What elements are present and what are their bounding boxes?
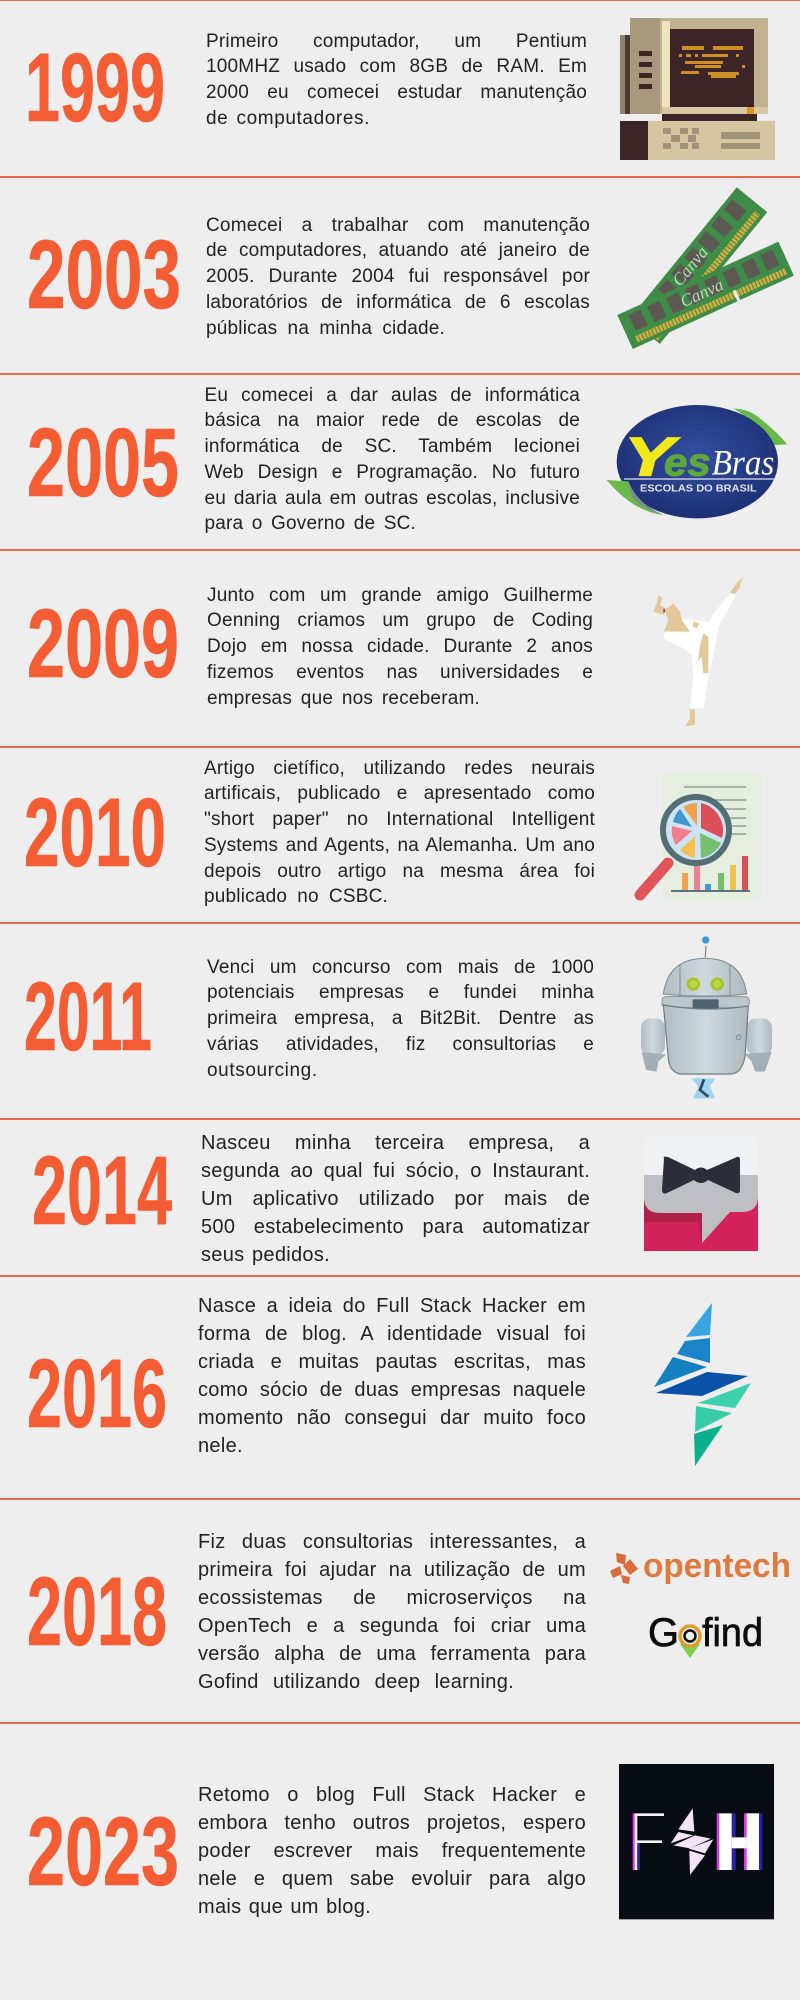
text: 2014 — [201, 1132, 590, 1266]
text: 2014: Um aplicativo utilizado por mais de — [201, 1188, 590, 1210]
text: 2023: embora tenho outros projetos, espero — [198, 1812, 586, 1834]
text: 1999: Primeiro computador, um Pentium — [206, 30, 587, 52]
text: 2016: como sócio de duas empresas naquele — [198, 1379, 586, 1401]
text: 2014: segunda ao qual fui sócio, o Instaurant. — [201, 1160, 590, 1182]
text: 2005: Eu comecei a dar aulas de informática — [204, 384, 580, 406]
text: 2018: Gofind utilizando deep learning. — [198, 1671, 514, 1693]
text: 2016 — [198, 1295, 586, 1457]
upper stick — [629, 187, 767, 344]
text: 2003: públicas na minha cidade. — [206, 318, 445, 339]
icon: Full Stack Hacker lightning bolt — [654, 1303, 751, 1466]
text: 2003: laboratórios de informática de 6 escolas — [206, 292, 590, 313]
panel: 2010 — [0, 747, 800, 923]
text: 2005: Web Design e Programação. No futuro — [204, 462, 580, 483]
text: 2010: "short paper" no International Intelligent — [204, 809, 595, 830]
text: 2005: informática de SC. Também lecionei — [204, 436, 580, 457]
text: 2016: momento não consegui dar muito foco — [198, 1407, 586, 1429]
text: 2011: outsourcing. — [207, 1060, 318, 1081]
text: 2018: Fiz duas consultorias interessantes, a — [198, 1531, 586, 1553]
icon: Yes Bras logo: Y — [624, 425, 680, 487]
text: 2016: forma de blog. A identidade visual foi — [198, 1323, 586, 1345]
text: 2003: 2005. Durante 2004 fui responsável por — [206, 266, 590, 287]
icon: magnifier over report chart — [634, 773, 761, 900]
text: 2003: de computadores, atuando até janeiro de — [206, 240, 590, 261]
text: 2009: Oenning criamos um grupo de Coding — [207, 610, 593, 631]
text: 2011: primeira empresa, a Bit2Bit. Dentre as — [207, 1008, 594, 1029]
text: 2009: fizemos eventos nas universidades e — [207, 662, 593, 683]
text: 2023: poder escrever mais frequentemente — [198, 1840, 586, 1862]
text: 2014: seus pedidos. — [201, 1244, 330, 1266]
text: 2016: Nasce a ideia do Full Stack Hacker em — [198, 1295, 586, 1317]
lower stick — [617, 242, 794, 349]
text: 2003 — [206, 214, 590, 339]
text: 2010: Systems and Agents, na Alemanha. Um ano — [204, 835, 595, 856]
icon: robot — [641, 936, 772, 1098]
text: 2009: Junto com um grande amigo Guilherme — [207, 584, 593, 606]
text: 2023: Retomo o blog Full Stack Hacker e — [198, 1784, 586, 1806]
icon: Instaurant app logo — [644, 1156, 758, 1251]
text: 2010: Artigo cietífico, utilizando redes neurais — [204, 758, 595, 778]
icon: Yes Bras logo: ESCOLAS DO BRASIL — [640, 483, 757, 494]
text: 2005: para o Governo de SC. — [204, 513, 416, 534]
text: 2003: Comecei a trabalhar com manutenção — [206, 214, 590, 236]
text: 2005 — [204, 384, 580, 534]
text: 2018: ecossistemas de microserviços na — [198, 1587, 586, 1609]
text: 1999: de computadores. — [206, 108, 370, 129]
text: 2014: 500 estabelecimento para automatizar — [201, 1216, 590, 1238]
text: 2010: artificais, publicado e apresentado como — [204, 783, 595, 804]
text: 1999 — [206, 30, 587, 129]
text: 1999: 100MHZ usado com 8GB de RAM. Em — [206, 56, 587, 77]
text: 2010: depois outro artigo na mesma área foi — [204, 861, 595, 882]
panel: 2014 — [0, 1119, 800, 1276]
panel: 2005 — [0, 374, 800, 550]
icon: Yes Bras logo — [606, 405, 788, 518]
text: 2011: Venci um concurso com mais de 1000 — [207, 956, 594, 978]
upper stick: Canva — [669, 243, 712, 290]
lower stick: Canva — [677, 275, 727, 311]
text: 2009: Dojo em nossa cidade. Durante 2 anos — [207, 636, 593, 657]
panel: 2011 — [0, 923, 800, 1119]
panel: 2023 — [0, 1723, 800, 2000]
logo: Gofind — [648, 1615, 763, 1658]
panel: 2018 — [0, 1499, 800, 1723]
text: 2023: mais que um blog. — [198, 1896, 371, 1918]
panel: 2003 — [0, 177, 800, 374]
icon: Yes Bras logo: es — [664, 440, 711, 484]
text: 2005: eu daria aula em outras escolas, inclusive — [204, 488, 580, 509]
text: 2009: empresas que nos receberam. — [207, 688, 480, 709]
text: 1999: 2000 eu comecei estudar manutenção — [206, 82, 587, 103]
text: 2023: nele e quem sabe evoluir para algo — [198, 1868, 586, 1890]
text: 2023 — [198, 1784, 586, 1918]
panel: 1999 — [0, 0, 800, 176]
icon: RAM memory sticks — [617, 187, 794, 349]
text: 2018 — [198, 1531, 586, 1693]
icon: FSH logo square — [619, 1764, 774, 1920]
text: 2018: versão alpha de uma ferramenta para — [198, 1643, 586, 1665]
text: 2016: criada e muitas pautas escritas, mas — [198, 1351, 586, 1373]
text: 2018: primeira foi ajudar na utilização de um — [198, 1559, 586, 1581]
panel: 2009 — [0, 550, 800, 747]
text: 2011: várias atividades, fiz consultorias e — [207, 1034, 594, 1055]
icon: karate kick figure — [654, 578, 743, 727]
text: 2016: nele. — [198, 1435, 243, 1457]
panel: 2016 — [0, 1276, 800, 1499]
text: 2010: publicado no CSBC. — [204, 886, 388, 907]
text: 2011 — [207, 956, 594, 1081]
text: 2011: potenciais empresas e fundei minha — [207, 982, 594, 1003]
text: 2018: OpenTech e a segunda foi criar uma — [198, 1615, 586, 1637]
text: 2005: básica na maior rede de escolas de — [204, 410, 580, 431]
text: 2014: Nasceu minha terceira empresa, a — [201, 1132, 590, 1154]
text: 2010 — [204, 758, 595, 907]
icon: retro pixel computer — [620, 18, 775, 160]
icon: Yes Bras logo: Bras — [712, 443, 774, 483]
text: 2009 — [207, 584, 593, 709]
